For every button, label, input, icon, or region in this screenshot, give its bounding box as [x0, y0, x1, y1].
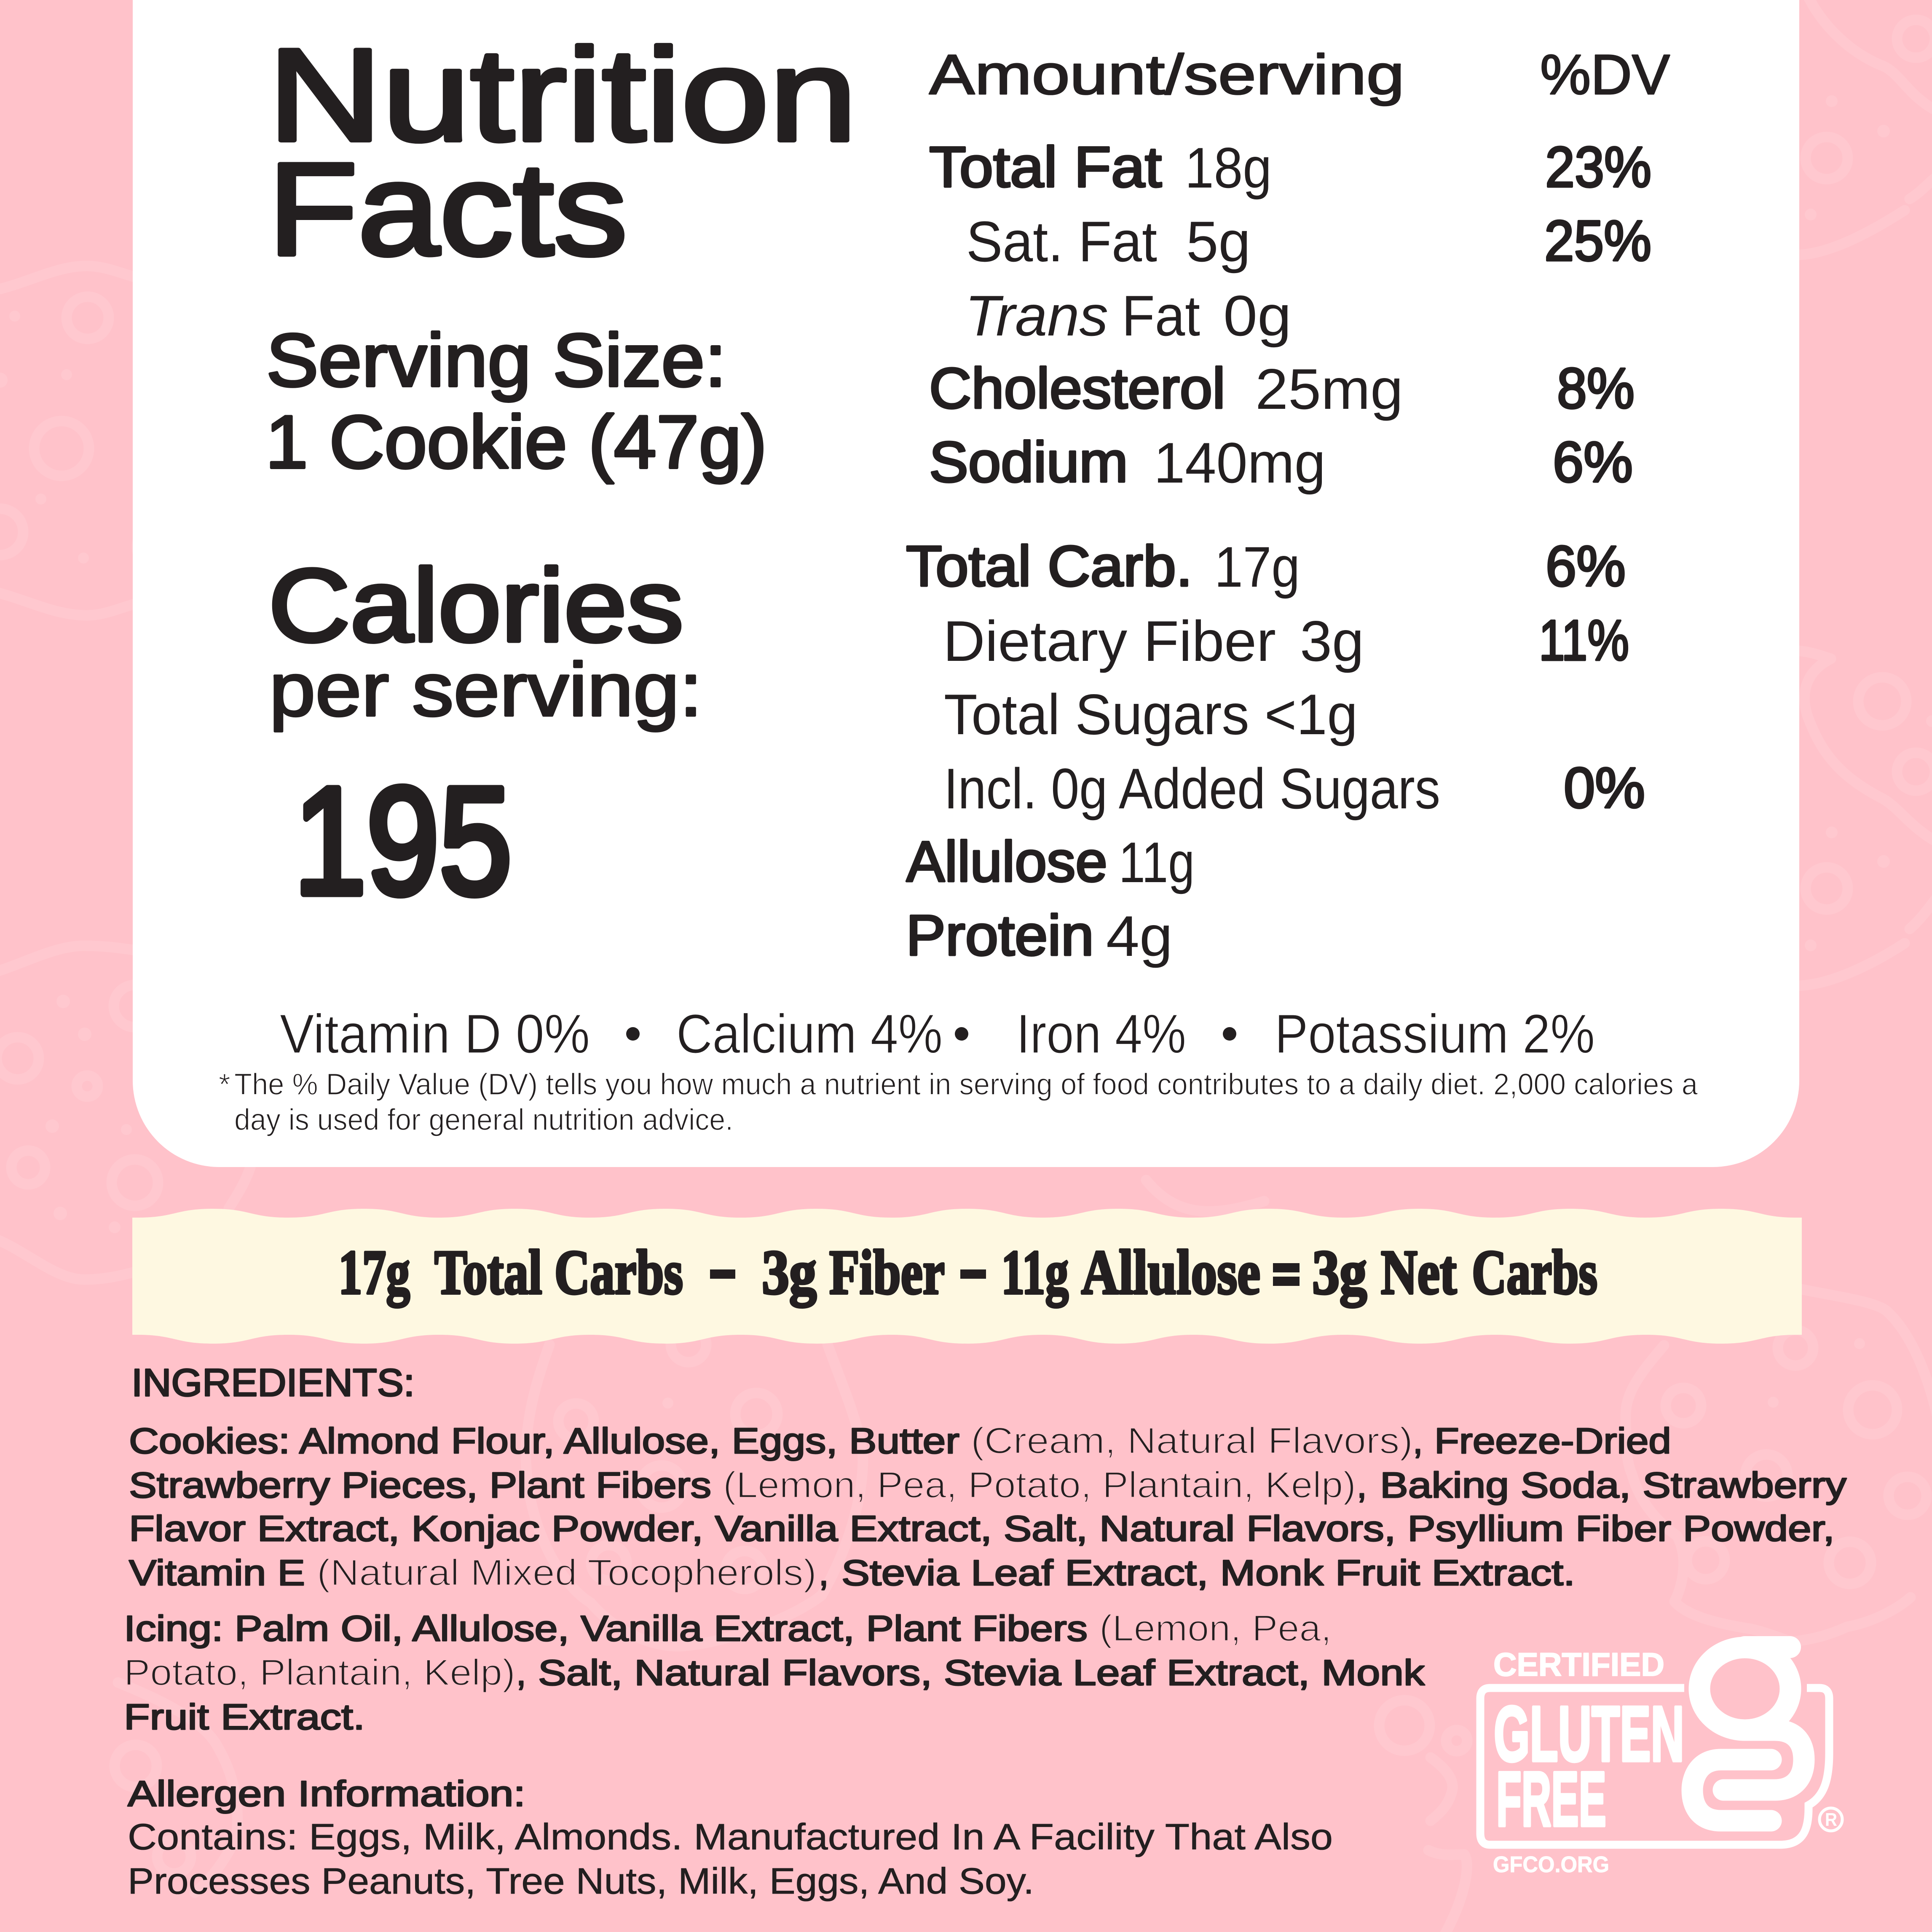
text block: calories per serving — [268, 547, 702, 732]
fat, cholesterol and sodium rows: Total Fat — [929, 135, 1162, 199]
text block: serving size — [265, 318, 767, 484]
equation: net carbs calculation: Total Carbs — [434, 1237, 683, 1307]
text block: allergen information: Allergen Information: — [128, 1774, 525, 1814]
carbohydrate, allulose and protein rows — [906, 534, 1645, 968]
footnote: daily value explanation: The % Daily Value (DV) tells you how much a nutrient in serving of food contributes to a daily diet. 2,000 calories a — [234, 1068, 1698, 1101]
text block: cookie ingredients: Strawberry Pieces, Plant Fibers — [129, 1465, 711, 1505]
footnote: daily value explanation: * — [219, 1068, 230, 1101]
vitamins and minerals row: Potassium 2% — [1275, 1003, 1595, 1065]
carbohydrate, allulose and protein rows: 11g — [1119, 830, 1195, 894]
equation: net carbs calculation: Net — [1381, 1237, 1457, 1307]
carbohydrate, allulose and protein rows: Allulose — [906, 829, 1107, 894]
icon: certified gluten free logo: CERTIFIED — [1493, 1646, 1664, 1683]
vitamins and minerals row: Calcium 4% — [676, 1003, 943, 1065]
carbohydrate, allulose and protein rows: 3g — [1300, 609, 1364, 673]
text block: cookie ingredients — [129, 1420, 1847, 1593]
carbohydrate, allulose and protein rows: Protein — [906, 903, 1094, 967]
text block: allergen information: Processes Peanuts, Tree Nuts, Milk, Eggs, And Soy. — [128, 1861, 1034, 1902]
table header: amount per serving and daily value: Amount/serving — [929, 43, 1404, 106]
text block: cookie ingredients: Freeze-Dried — [1434, 1421, 1671, 1461]
calorie count: 195: 195 — [294, 755, 512, 926]
fat, cholesterol and sodium rows: 25mg — [1255, 357, 1403, 421]
text block: cookie ingredients: (Cream, Natural Flavors) — [971, 1420, 1413, 1461]
heading: ingredients: INGREDIENTS: — [131, 1361, 415, 1404]
equation: net carbs calculation: 3g — [1312, 1237, 1367, 1307]
vitamins and minerals row: Iron 4% — [1016, 1003, 1186, 1065]
fat, cholesterol and sodium rows: Sodium — [929, 430, 1128, 494]
carbohydrate, allulose and protein rows: 0% — [1564, 756, 1645, 820]
icon: certified gluten free logo: GFCO.ORG — [1493, 1852, 1609, 1877]
footnote: daily value explanation — [219, 1068, 1698, 1137]
fat, cholesterol and sodium rows: Trans — [965, 284, 1108, 348]
carbohydrate, allulose and protein rows: Total Sugars <1g — [944, 682, 1358, 746]
text block: cookie ingredients: , — [1357, 1465, 1367, 1505]
fat, cholesterol and sodium rows: 6% — [1553, 430, 1633, 494]
carbohydrate, allulose and protein rows: 6% — [1546, 534, 1626, 598]
text block: cookie ingredients: , — [1413, 1421, 1423, 1461]
equation: net carbs calculation: 17g — [338, 1237, 410, 1307]
text block: cookie ingredients: Flavor Extract, Konjac Powder, Vanilla Extract, Salt, Natural Flavors, Psyllium Fiber Powder, — [129, 1509, 1835, 1549]
panel: net carbs wavy banner — [132, 1209, 1802, 1344]
text block: icing ingredients: , — [516, 1653, 526, 1693]
equation: net carbs calculation: Allulose — [1081, 1237, 1260, 1307]
equation: net carbs calculation — [338, 1237, 1597, 1307]
icon: certified gluten free logo: GLUTEN — [1494, 1690, 1684, 1778]
text block: calories per serving: per serving: — [269, 647, 702, 732]
fat, cholesterol and sodium rows: Fat — [1122, 284, 1200, 348]
heading: Nutrition Facts: Nutrition — [268, 22, 857, 169]
equation: net carbs calculation: Fiber — [829, 1237, 945, 1307]
fat, cholesterol and sodium rows: 8% — [1557, 356, 1635, 420]
fat, cholesterol and sodium rows: 0g — [1223, 284, 1292, 348]
text block: cookie ingredients: Cookies: Almond Flour, Allulose, Eggs, Butter — [129, 1421, 959, 1461]
equation: net carbs calculation: Carbs — [1472, 1237, 1597, 1307]
fat, cholesterol and sodium rows: 140mg — [1154, 431, 1326, 495]
table header: amount per serving and daily value — [929, 43, 1670, 106]
carbohydrate, allulose and protein rows: Total Carb. — [906, 534, 1192, 598]
text block: cookie ingredients: , — [819, 1553, 829, 1593]
carbohydrate, allulose and protein rows: Incl. 0g Added Sugars — [944, 757, 1440, 821]
vitamins and minerals row — [280, 1003, 1595, 1065]
text block: serving size: Serving Size: — [266, 318, 726, 402]
carbohydrate, allulose and protein rows: 17g — [1214, 535, 1300, 599]
text block: cookie ingredients: Baking Soda, Strawberry — [1380, 1465, 1847, 1505]
vitamins and minerals row: Vitamin D 0% — [280, 1003, 590, 1065]
carbohydrate, allulose and protein rows: 4g — [1106, 904, 1173, 968]
text block: icing ingredients: Potato, Plantain, Kelp) — [124, 1652, 515, 1693]
equation: net carbs calculation: 3g — [762, 1237, 817, 1307]
text block: icing ingredients: Fruit Extract. — [124, 1697, 365, 1737]
carbohydrate, allulose and protein rows: 11% — [1539, 608, 1629, 672]
text block: allergen information — [128, 1774, 1333, 1902]
heading: Nutrition Facts: Facts — [268, 136, 627, 283]
text block: calories per serving: Calories — [268, 547, 683, 663]
icon: certified gluten free logo: R — [1825, 1809, 1837, 1830]
text block: cookie ingredients: (Lemon, Pea, Potato, Plantain, Kelp) — [723, 1465, 1356, 1505]
fat, cholesterol and sodium rows: 23% — [1545, 135, 1651, 199]
fat, cholesterol and sodium rows — [929, 135, 1651, 495]
fat, cholesterol and sodium rows: Cholesterol — [929, 356, 1225, 420]
carbohydrate, allulose and protein rows: Dietary Fiber — [943, 609, 1276, 673]
fat, cholesterol and sodium rows: 25% — [1544, 209, 1651, 273]
fat, cholesterol and sodium rows: 18g — [1185, 136, 1272, 200]
table header: amount per serving and daily value: %DV — [1540, 43, 1670, 106]
panel: nutrition facts card — [133, 0, 1799, 1167]
text block: serving size: 1 Cookie (47g) — [265, 400, 767, 484]
icon: certified gluten free logo: FREE — [1496, 1755, 1606, 1842]
text block: cookie ingredients: Vitamin E — [129, 1553, 305, 1593]
text block: icing ingredients — [124, 1608, 1425, 1737]
text block: allergen information: Contains: Eggs, Milk, Almonds. Manufactured In A Facility That Also — [128, 1817, 1333, 1857]
text block: cookie ingredients: (Natural Mixed Tocopherols) — [317, 1552, 817, 1593]
text block: icing ingredients: Salt, Natural Flavors, Stevia Leaf Extract, Monk — [538, 1653, 1425, 1693]
text block: icing ingredients: (Lemon, Pea, — [1099, 1608, 1332, 1649]
icon: certified gluten free logo — [1480, 1646, 1842, 1877]
footnote: daily value explanation: day is used for general nutrition advice. — [234, 1103, 733, 1137]
text block: icing ingredients: Icing: Palm Oil, Allulose, Vanilla Extract, Plant Fibers — [124, 1609, 1088, 1649]
fat, cholesterol and sodium rows: Sat. Fat — [966, 209, 1157, 274]
heading: Nutrition Facts — [268, 22, 857, 283]
equation: net carbs calculation: 11g — [1001, 1237, 1069, 1307]
text block: cookie ingredients: Stevia Leaf Extract, Monk Fruit Extract. — [841, 1553, 1575, 1593]
fat, cholesterol and sodium rows: 5g — [1186, 209, 1251, 274]
